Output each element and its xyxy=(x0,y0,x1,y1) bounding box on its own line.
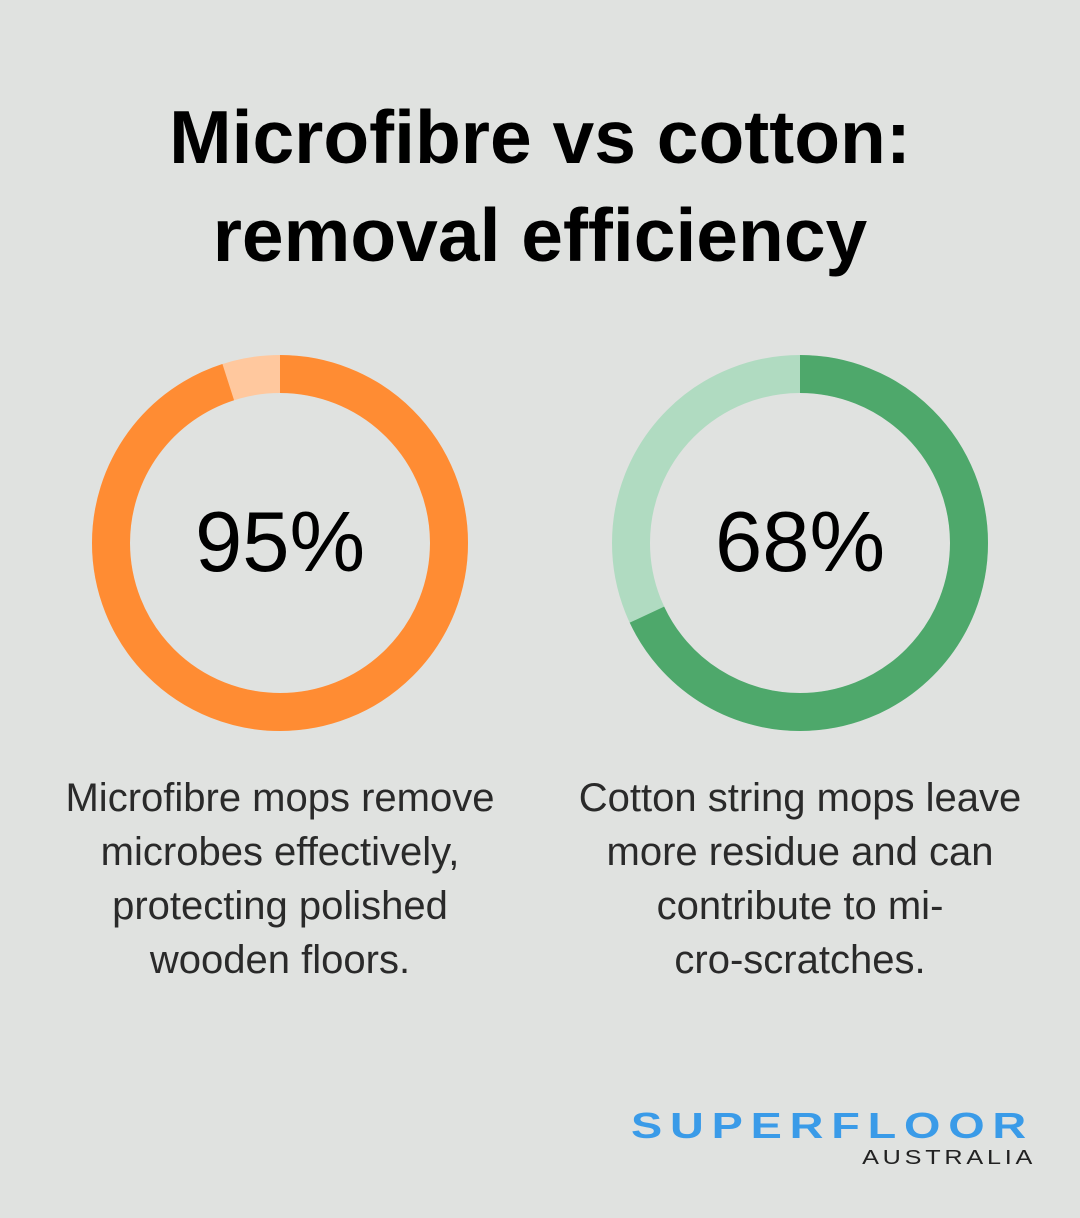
logo: SUPERFLOOR xyxy=(631,1105,1034,1146)
text: cotton: cro-scratches. xyxy=(674,938,926,982)
text: cotton: contribute to mi- xyxy=(657,884,943,928)
donut: cotton 68% xyxy=(612,355,988,731)
title xyxy=(169,95,911,277)
text: microfibre xyxy=(65,776,494,982)
logo xyxy=(631,1105,1036,1169)
text: cotton: Cotton string mops leave xyxy=(579,776,1021,820)
title: Microfibre vs cotton: xyxy=(169,95,911,179)
donut: microfibre 95%: 95% xyxy=(195,495,365,590)
logo: AUSTRALIA xyxy=(862,1147,1036,1169)
donut: microfibre 95% xyxy=(92,355,468,731)
title: removal efficiency xyxy=(213,193,867,277)
text: microfibre: wooden floors. xyxy=(150,938,410,982)
text: cotton: more residue and can xyxy=(607,830,993,874)
text: microfibre: microbes effectively, xyxy=(101,830,459,874)
text: microfibre: Microfibre mops remove xyxy=(65,776,494,820)
text: microfibre: protecting polished xyxy=(112,884,448,928)
text: cotton xyxy=(579,776,1021,982)
donut: cotton 68%: 68% xyxy=(715,495,885,590)
